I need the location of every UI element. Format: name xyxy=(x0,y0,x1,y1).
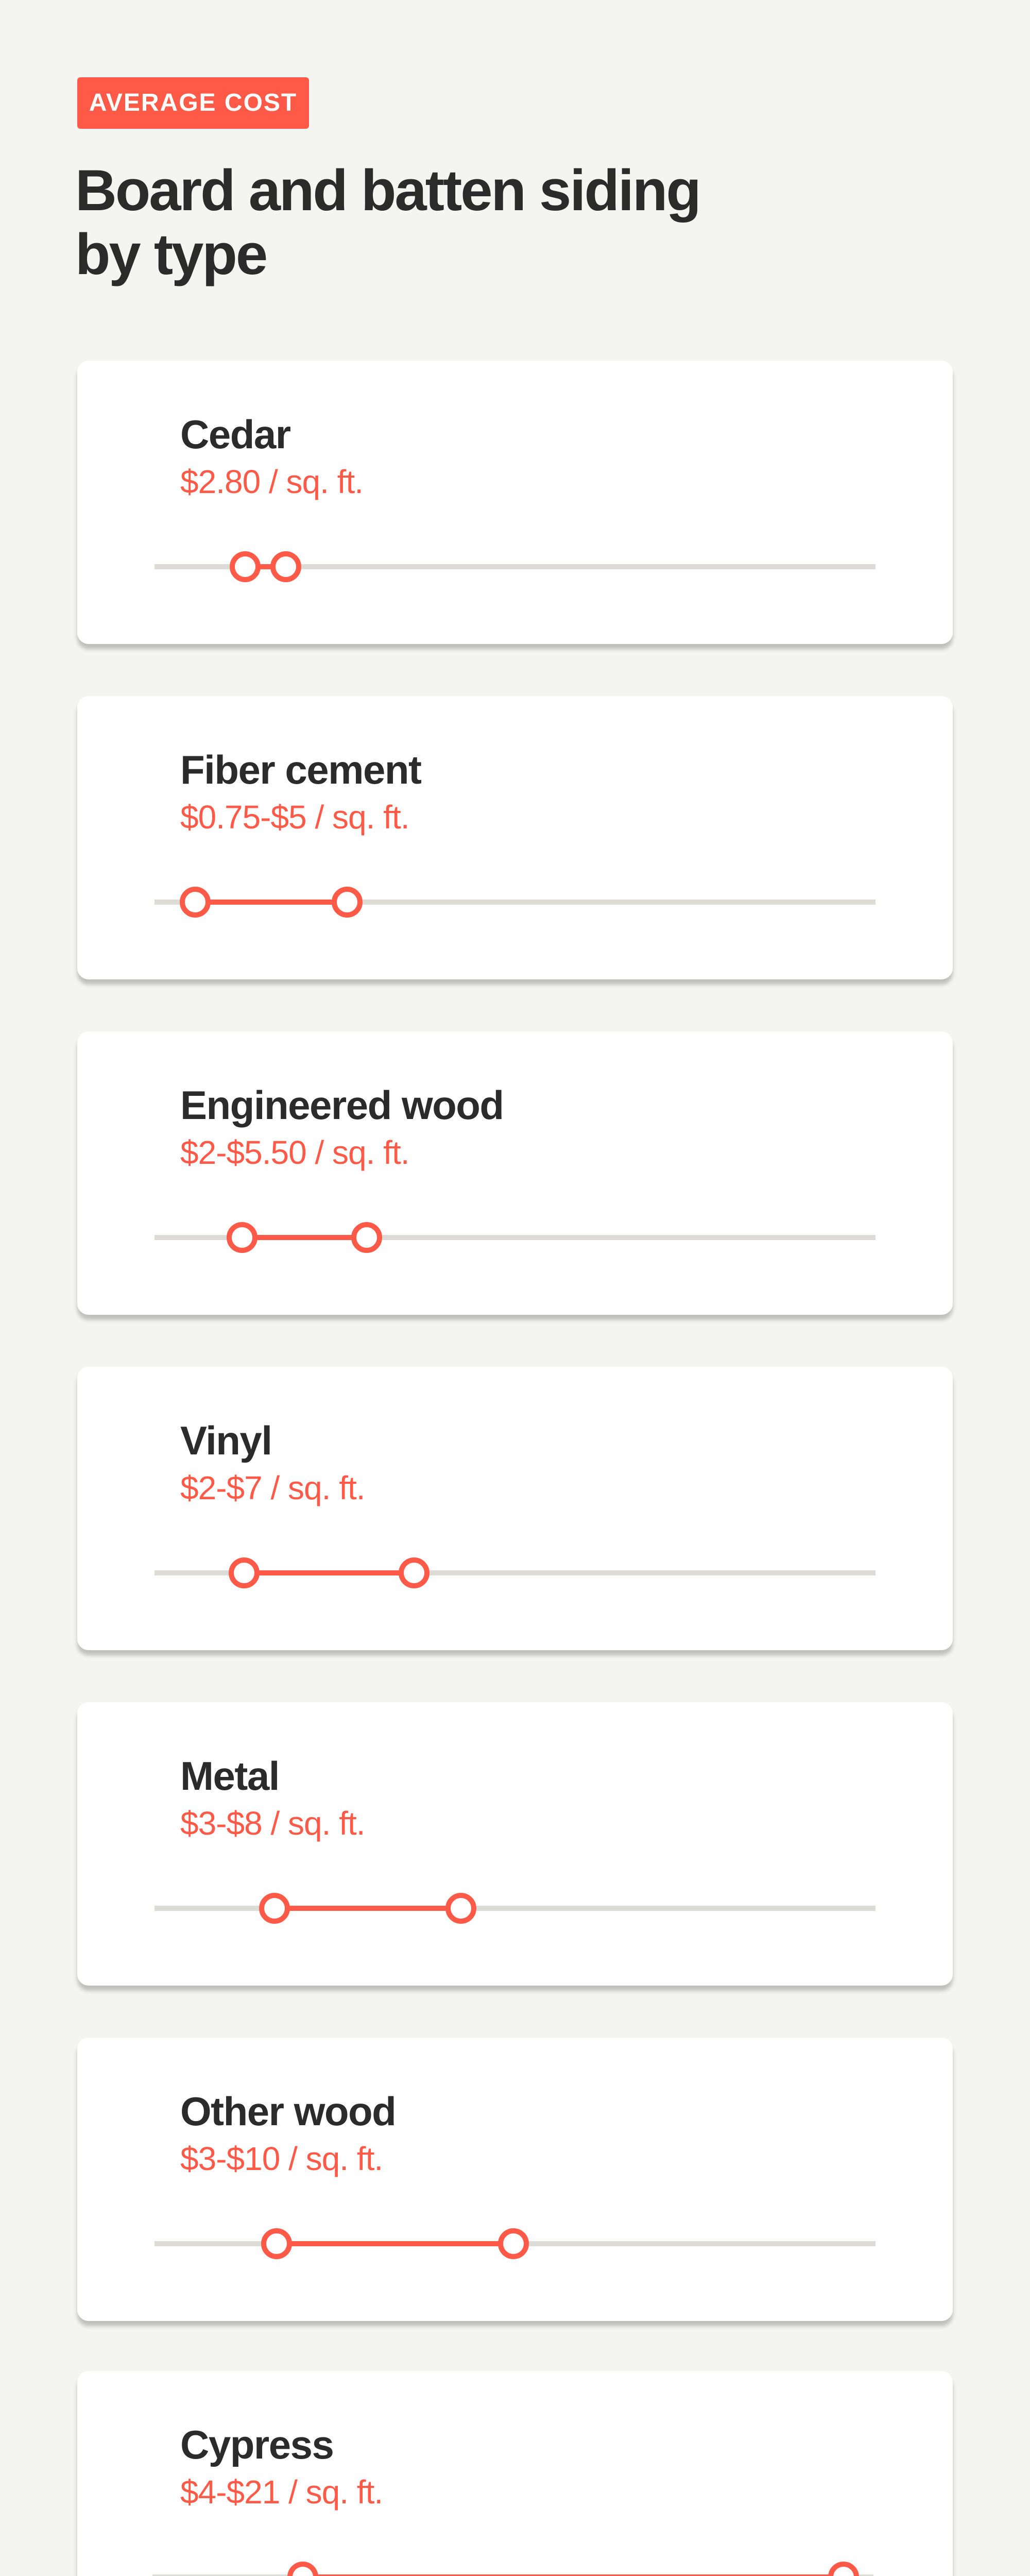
panel: engineered wood xyxy=(77,1031,953,1315)
heading: other wood: Other wood xyxy=(180,2089,396,2134)
heading: cedar: Cedar xyxy=(180,412,290,457)
panel: other wood xyxy=(77,2038,953,2321)
range chart: metal xyxy=(154,1893,876,1924)
price: other wood: $3-$10 / sq. ft. xyxy=(180,2140,383,2177)
title: by type xyxy=(75,222,266,286)
range chart: other wood xyxy=(154,2228,876,2259)
price: cedar: $2.80 / sq. ft. xyxy=(180,463,363,500)
range chart: engineered wood xyxy=(154,1222,876,1253)
range chart: cypress xyxy=(152,2562,873,2576)
panel: cypress xyxy=(77,2371,953,2576)
price: fiber cement: $0.75-$5 / sq. ft. xyxy=(180,799,409,836)
tag: average cost xyxy=(77,77,309,129)
panel: metal xyxy=(77,1702,953,1986)
heading: engineered wood: Engineered wood xyxy=(180,1082,504,1128)
heading: cypress: Cypress xyxy=(180,2422,333,2467)
tag: average cost: AVERAGE COST xyxy=(89,89,297,116)
range chart: cedar xyxy=(154,551,876,582)
panel: fiber cement xyxy=(77,696,953,979)
price: cypress: $4-$21 / sq. ft. xyxy=(180,2473,383,2511)
price: vinyl: $2-$7 / sq. ft. xyxy=(180,1469,365,1506)
title xyxy=(75,158,700,286)
range chart: vinyl xyxy=(154,1557,876,1588)
range chart: fiber cement xyxy=(154,887,876,918)
panel: vinyl xyxy=(77,1367,953,1650)
price: engineered wood: $2-$5.50 / sq. ft. xyxy=(180,1134,409,1171)
title: Board and batten siding xyxy=(75,158,700,223)
heading: vinyl: Vinyl xyxy=(180,1418,271,1463)
price: metal: $3-$8 / sq. ft. xyxy=(180,1805,365,1842)
heading: metal: Metal xyxy=(180,1753,279,1799)
panel: cedar xyxy=(77,361,953,644)
heading: fiber cement: Fiber cement xyxy=(180,747,421,792)
